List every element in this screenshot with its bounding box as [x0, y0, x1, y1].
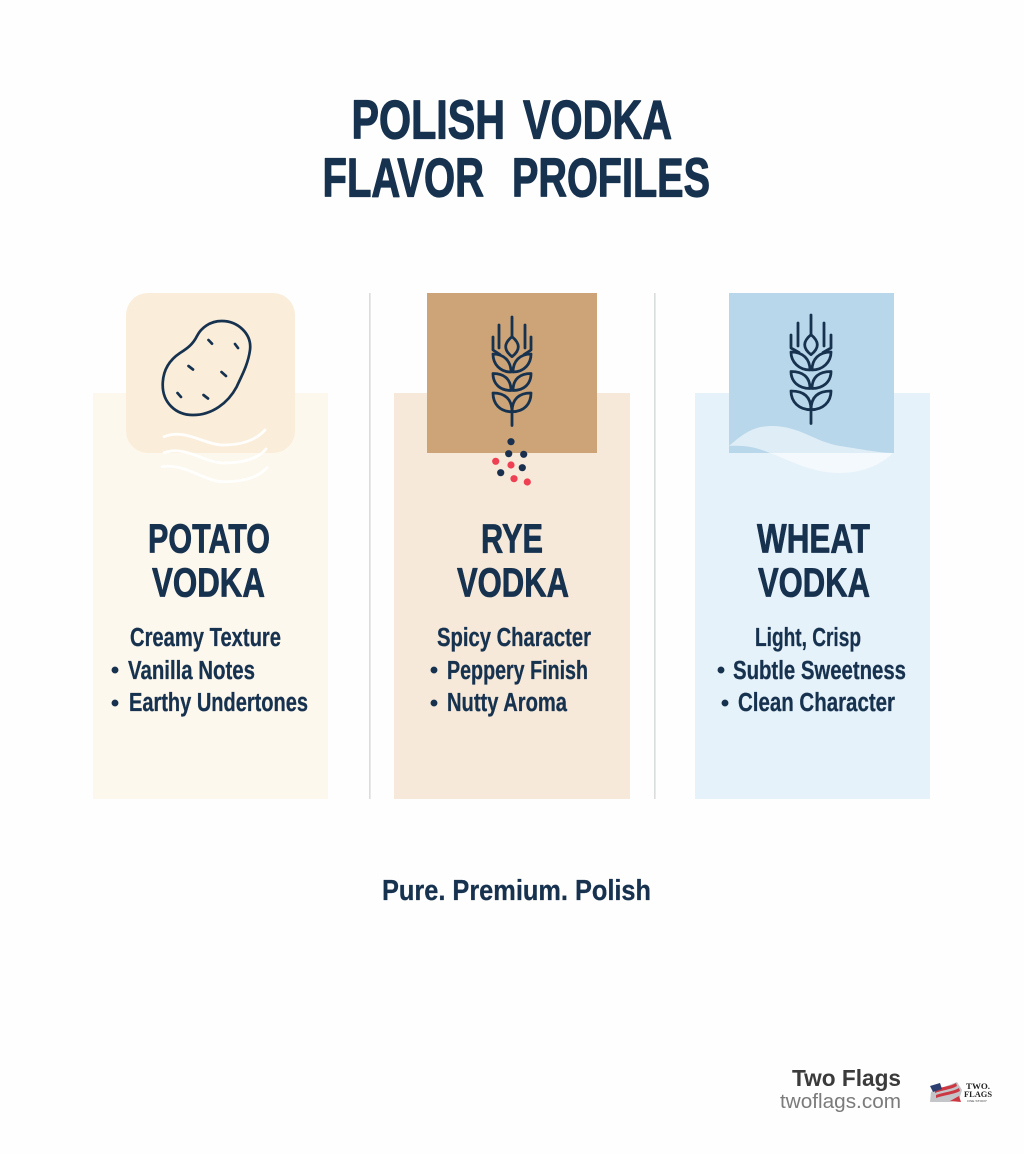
rye flavor notes	[431, 624, 591, 717]
rye flavor notes: Spicy Character	[437, 624, 591, 652]
logo: Two Flags	[930, 1082, 993, 1103]
potato flavor notes: Earthy Undertones	[129, 689, 308, 717]
potato flavor notes: Vanilla Notes	[128, 657, 255, 685]
heading: wheat vodka: WHEAT	[757, 516, 870, 562]
tagline: Pure. Premium. Polish	[382, 875, 651, 907]
title: VODKA	[523, 90, 672, 150]
rye flavor notes: Peppery Finish	[447, 657, 588, 685]
wheat flavor notes	[718, 624, 906, 717]
heading: rye vodka: RYE	[481, 516, 543, 562]
footer brand text: Two Flags	[792, 1065, 901, 1091]
title: FLAVOR	[322, 147, 484, 208]
panel: rye vodka	[394, 293, 630, 799]
wheat flavor notes: Clean Character	[738, 689, 895, 717]
footer brand text: twoflags.com	[780, 1091, 901, 1113]
heading: potato vodka: VODKA	[152, 560, 265, 606]
panel background: wheat	[695, 393, 930, 799]
panel background: rye	[394, 393, 630, 799]
panel: wheat vodka	[695, 293, 930, 799]
title	[322, 90, 710, 208]
title: POLISH	[352, 90, 505, 150]
rye flavor notes: Nutty Aroma	[447, 689, 568, 717]
potato flavor notes: Creamy Texture	[130, 624, 281, 652]
icon: rye wheat with pepper dots	[427, 293, 597, 486]
title: PROFILES	[512, 147, 710, 208]
heading: rye vodka	[457, 516, 569, 606]
heading: potato vodka	[148, 516, 270, 606]
heading: wheat vodka	[757, 516, 870, 606]
logo: Two Flags: TWO.	[966, 1082, 990, 1091]
logo: Two Flags: FLAGS	[964, 1090, 993, 1099]
wheat flavor notes: Subtle Sweetness	[733, 657, 906, 685]
heading: rye vodka: VODKA	[457, 560, 569, 606]
wheat flavor notes: Light, Crisp	[755, 624, 861, 652]
panel background: potato	[93, 393, 328, 799]
logo: Two Flags: ONE STORY	[967, 1099, 987, 1103]
footer brand text	[780, 1065, 901, 1113]
heading: potato vodka: POTATO	[148, 516, 270, 562]
icon: wheat with wave	[729, 293, 894, 473]
potato flavor notes	[112, 624, 308, 717]
panel: potato vodka	[93, 293, 328, 799]
heading: wheat vodka: VODKA	[758, 560, 870, 606]
icon: potato	[126, 293, 295, 482]
